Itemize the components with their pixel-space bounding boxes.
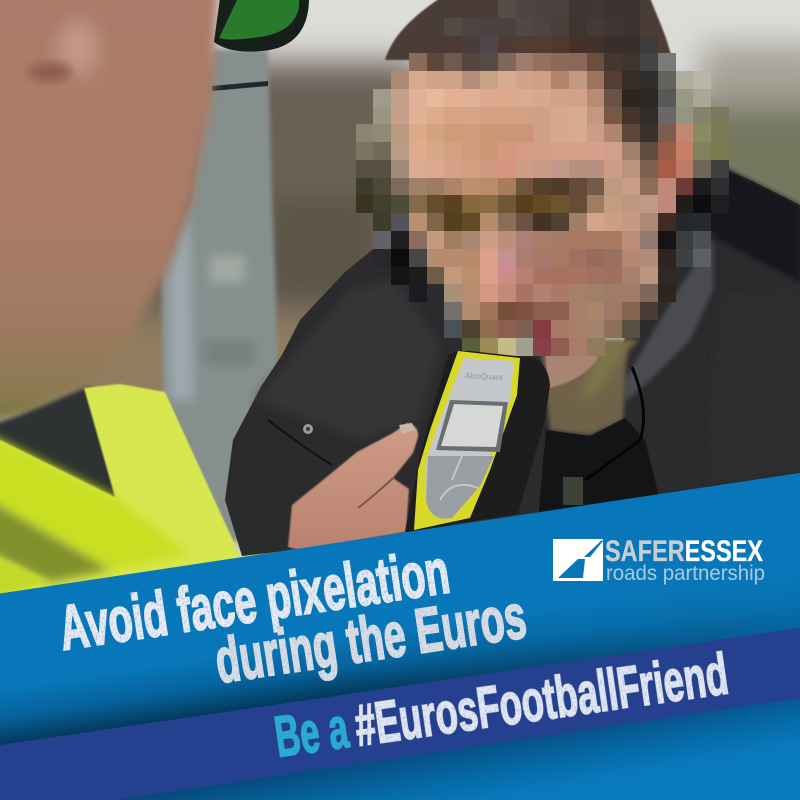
headline line 2: during the Euros [211, 581, 531, 697]
main blue banner [0, 473, 800, 745]
hi-vis jacket [0, 384, 305, 610]
logo icon: road [553, 539, 603, 581]
dark blue hashtag banner [0, 628, 800, 800]
blurred trees and verge [60, 45, 800, 535]
device screen [436, 400, 508, 452]
headline line 1: Avoid face pixelation [55, 537, 454, 664]
device lower button panel [426, 456, 494, 519]
sky background [0, 0, 800, 620]
banner right side fade [350, 473, 800, 694]
photo: roadside breath test [0, 0, 800, 620]
officer blurred head [0, 0, 220, 430]
hashtag slogan [271, 642, 732, 770]
headline [55, 537, 531, 697]
lower blue background [0, 628, 800, 800]
black shirt and zip [538, 367, 660, 520]
device pouch [405, 351, 550, 532]
Be a: Be a [271, 695, 353, 770]
metal post [161, 50, 279, 540]
breathalyser device [405, 351, 550, 532]
officer green cap peak [214, 0, 309, 52]
logo: Safer Essex Roads Partnership [553, 535, 765, 585]
pixelated face mosaic [356, 0, 729, 356]
man in black puffer jacket [225, 160, 800, 556]
logo wordmark: SAFERESSEX [605, 535, 763, 568]
device yellow casing [414, 351, 520, 530]
device brand label: AlcoQuant [465, 371, 503, 382]
neck and chin [540, 340, 640, 435]
hair [385, 0, 672, 60]
logo strapline: roads partnership [606, 562, 765, 585]
officer hand [288, 423, 418, 550]
device grey face [425, 358, 514, 519]
